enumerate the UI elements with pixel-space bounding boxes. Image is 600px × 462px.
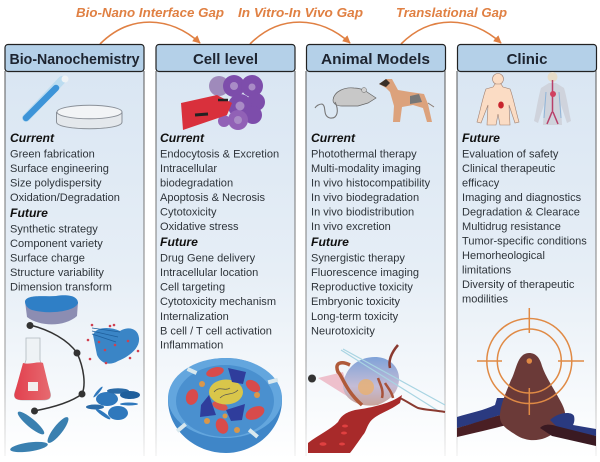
- text block: future list: Synergistic therapy: [311, 252, 405, 264]
- icon: nanodiscs: [86, 386, 140, 421]
- text block: current list: In vivo histocompatibility: [311, 177, 431, 189]
- text block: current list: Apoptosis & Necrosis: [160, 192, 265, 204]
- text block: future list: Clinical therapeutic: [462, 163, 556, 175]
- text block: future list: modilities: [462, 294, 509, 306]
- text block: future list: Multidrug resistance: [462, 221, 561, 233]
- panel: Animal Models: [306, 44, 446, 459]
- text block: future list: Degradation & Clearace: [462, 206, 580, 218]
- text block: future list: [462, 131, 587, 306]
- text block: future list: Embryonic toxicity: [311, 296, 400, 308]
- illustration: synthesis network: [10, 295, 140, 454]
- text block: current list: Surface engineering: [10, 163, 109, 175]
- icon: circulatory system: [534, 72, 571, 125]
- text block: future list: Future: [10, 206, 48, 220]
- illustration: targeted tumor: [457, 308, 596, 446]
- heading: Clinic: Clinic: [507, 51, 547, 68]
- text block: future list: Dimension transform: [10, 282, 112, 294]
- text block: future list: Structure variability: [10, 267, 104, 279]
- nucleus: [209, 380, 243, 412]
- icon: dog: [379, 79, 434, 122]
- gap label: Translational Gap: Translational Gap: [396, 5, 507, 20]
- text block: future list: Cytotoxicity mechanism: [160, 296, 276, 308]
- heading: Cell level: Cell level: [193, 51, 258, 68]
- text block: current list: Photothermal therapy: [311, 148, 417, 160]
- text block: current list: [160, 131, 279, 233]
- text block: current list: Current: [10, 131, 55, 145]
- text block: current list: Intracellular: [160, 163, 217, 175]
- heading: Clinic: [458, 44, 596, 72]
- text block: future list: [160, 235, 276, 352]
- heading: Animal Models: Animal Models: [321, 51, 430, 68]
- arrow: cell to animal: [250, 22, 350, 44]
- icon: flask: [14, 338, 51, 400]
- text block: future list: Intracellular location: [160, 267, 258, 279]
- text block: future list: Tumor-specific conditions: [462, 236, 587, 248]
- arrow: bio-nano to cell: [100, 22, 200, 44]
- icon: nanorods: [10, 409, 71, 454]
- text block: future list: limitations: [462, 264, 512, 276]
- text block: future list: [311, 235, 419, 337]
- icon: blue block: [25, 295, 78, 324]
- icon: body with tumor: [477, 74, 519, 125]
- text block: future list: Hemorheological: [462, 250, 545, 262]
- text block: future list: Future: [311, 235, 349, 249]
- text block: current list: Endocytosis & Excretion: [160, 148, 279, 160]
- icon: tumor cells and vessel: [181, 75, 265, 130]
- text block: future list: Component variety: [10, 238, 103, 250]
- text block: current list: In vivo excretion: [311, 221, 391, 233]
- text block: current list: Cytotoxicity: [160, 206, 217, 218]
- text block: current list: [10, 131, 120, 204]
- illustration: cell cross-section: [168, 358, 282, 453]
- panel: Clinic: [457, 44, 596, 459]
- text block: current list: In vivo biodegradation: [311, 192, 419, 204]
- text block: future list: Drug Gene delivery: [160, 252, 256, 264]
- text block: future list: Future: [160, 235, 198, 249]
- heading: Bio-Nanochemistry: Bio-Nanochemistry: [10, 51, 140, 68]
- icon: mouse: [315, 88, 376, 118]
- icon: test tube: [26, 76, 68, 118]
- text block: current list: Oxidation/Degradation: [10, 192, 120, 204]
- text block: future list: Diversity of therapeutic: [462, 279, 575, 291]
- text block: future list: Evaluation of safety: [462, 148, 559, 160]
- text block: current list: Oxidative stress: [160, 221, 239, 233]
- panel: Cell level: [156, 44, 295, 459]
- cell rim bands: [176, 367, 278, 438]
- text block: current list: Current: [160, 131, 205, 145]
- icon: nanosheet with dots: [87, 324, 139, 364]
- panel: Bio-Nanochemistry: [5, 44, 144, 459]
- text block: current list: biodegradation: [160, 177, 233, 189]
- gap label: In Vitro-In Vivo Gap: In Vitro-In Vivo Gap: [238, 5, 363, 20]
- text block: future list: Imaging and diagnostics: [462, 192, 582, 204]
- heading: Cell level: [156, 44, 295, 72]
- text block: future list: Inflammation: [160, 340, 223, 352]
- text block: future list: Surface charge: [10, 252, 85, 264]
- text block: current list: Size polydispersity: [10, 177, 102, 189]
- text block: current list: Green fabrication: [10, 148, 95, 160]
- text block: future list: Neurotoxicity: [311, 325, 375, 337]
- text block: future list: Reproductive toxicity: [311, 282, 413, 294]
- text block: future list: Long-term toxicity: [311, 311, 399, 323]
- heading: Animal Models: [306, 44, 446, 72]
- text block: current list: Multi-modality imaging: [311, 163, 421, 175]
- icon: petri dish: [56, 105, 122, 129]
- heading: Bio-Nanochemistry: [5, 44, 144, 72]
- text block: future list: Future: [462, 131, 500, 145]
- illustration: tumor with laser and vessels: [308, 345, 445, 453]
- text block: current list: [311, 131, 431, 233]
- text block: future list: efficacy: [462, 177, 500, 189]
- text block: future list: Internalization: [160, 311, 229, 323]
- text block: current list: In vivo biodistribution: [311, 206, 414, 218]
- arrow: animal to clinic: [401, 22, 501, 44]
- text block: future list: B cell / T cell activation: [160, 325, 272, 337]
- text block: future list: [10, 206, 112, 294]
- target reticle: [477, 308, 584, 415]
- text block: current list: Current: [311, 131, 356, 145]
- text block: future list: Synthetic strategy: [10, 223, 98, 235]
- gap label: Bio-Nano Interface Gap: Bio-Nano Interface Gap: [76, 5, 224, 20]
- text block: future list: Fluorescence imaging: [311, 267, 419, 279]
- text block: future list: Cell targeting: [160, 282, 225, 294]
